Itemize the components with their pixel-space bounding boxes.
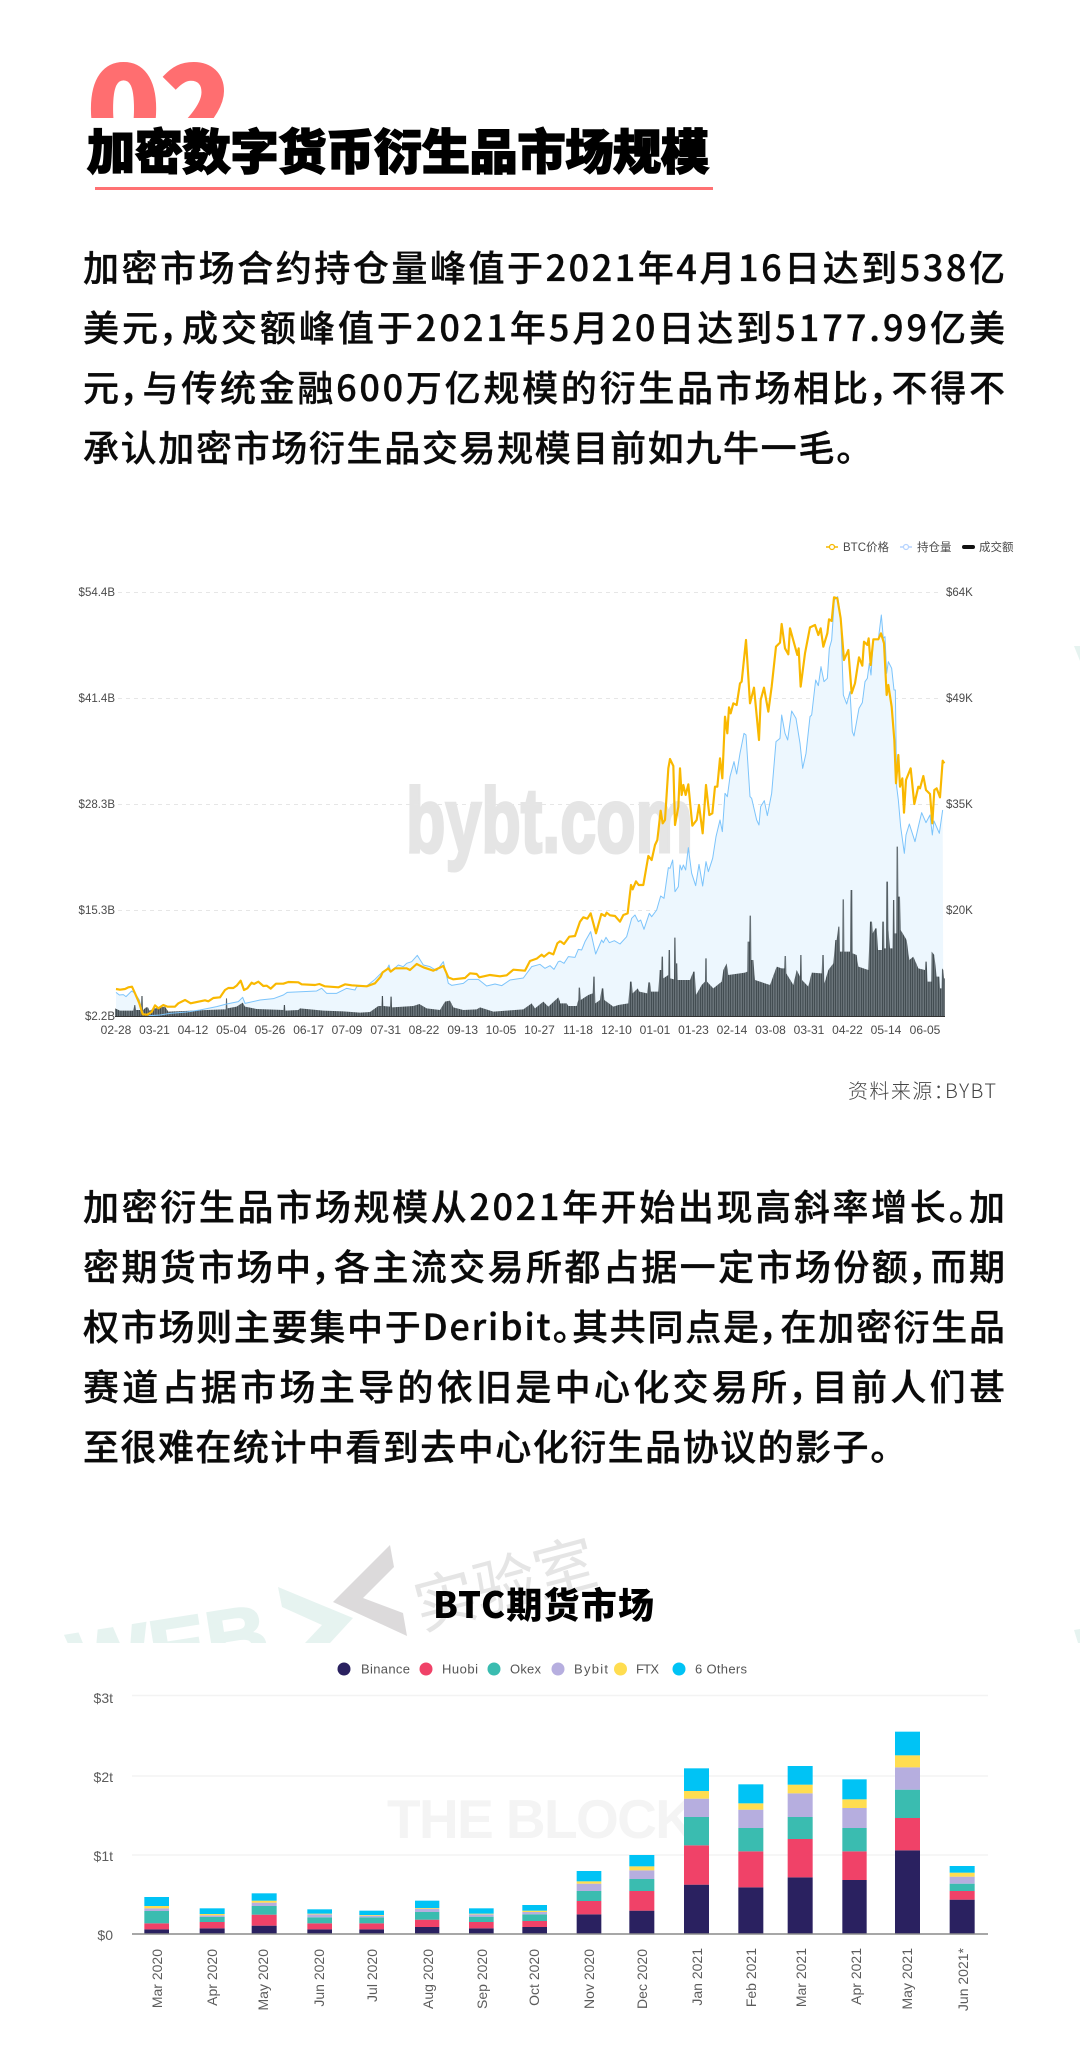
- volume bars: [115, 847, 945, 1017]
- right axis labels: [946, 587, 973, 917]
- x axis labels: 03-08: [755, 1023, 786, 1037]
- source note: 资料来源：BYBT: [848, 1075, 996, 1104]
- month labels: Jan 2021: [689, 1948, 705, 2006]
- bars late 2020 to 2021: [577, 1732, 975, 1934]
- month labels: [149, 1947, 971, 2011]
- text block: paragraph 1: 美元，成交额峰值于2021年5月20日达到5177.99亿美: [83, 300, 1005, 352]
- x axis labels: 07-09: [332, 1023, 363, 1037]
- y axis labels: $1t: [94, 1848, 113, 1864]
- BTC price line: [116, 597, 944, 1015]
- x axis line: [115, 1016, 945, 1018]
- watermark: WEB3 lab logo: [64, 1538, 1080, 1676]
- baseline axis: [132, 1933, 988, 1935]
- section number 02: 02: [87, 15, 233, 189]
- watermark: bybt.com: bybt.com: [406, 770, 693, 872]
- left axis labels: $54.4B: [79, 587, 115, 599]
- x axis labels: 04-12: [178, 1023, 209, 1037]
- month labels: Aug 2020: [420, 1949, 436, 2009]
- bar chart legend: Binance: [361, 1662, 410, 1676]
- month labels: Feb 2021: [743, 1948, 759, 2007]
- y axis labels: $3t: [94, 1690, 113, 1706]
- month labels: Dec 2020: [634, 1949, 650, 2009]
- month labels: Sep 2020: [474, 1949, 490, 2009]
- x axis labels: 08-22: [409, 1023, 440, 1037]
- x axis labels: 10-27: [524, 1023, 555, 1037]
- month labels: Jun 2020: [311, 1949, 327, 2007]
- month labels: Nov 2020: [581, 1949, 597, 2009]
- watermark: WEB3 lab logo: 实验室: [402, 1512, 605, 1647]
- month labels: May 2021: [899, 1948, 915, 2009]
- title: 加密数字货币衍生品市场规模: [87, 113, 709, 183]
- watermark: THE BLOCK: THE BLOCK: [387, 1788, 695, 1850]
- month labels: Apr 2021: [848, 1948, 864, 2005]
- bar chart legend: Huobi: [442, 1662, 478, 1676]
- text block: paragraph 1: [83, 240, 1005, 472]
- x axis labels: 07-31: [370, 1023, 401, 1037]
- month labels: Jun 2021*: [955, 1947, 971, 2011]
- month labels: Jul 2020: [364, 1949, 380, 2002]
- chart heading: BTC期货市场: [433, 1577, 654, 1629]
- title underline: [95, 187, 713, 190]
- month labels: Mar 2020: [149, 1949, 165, 2008]
- text block: paragraph 1: 加密市场合约持仓量峰值于2021年4月16日达到538亿: [83, 240, 1005, 292]
- left axis labels: $15.3B: [79, 905, 115, 917]
- left axis labels: $41.4B: [79, 693, 115, 705]
- right axis labels: $35K: [946, 799, 973, 811]
- x axis labels: 01-23: [678, 1023, 709, 1037]
- text block: paragraph 2: 赛道占据市场主导的依旧是中心化交易所，目前人们甚: [83, 1359, 1005, 1411]
- x axis labels: 05-04: [216, 1023, 247, 1037]
- text block: paragraph 1: 元，与传统金融600万亿规模的衍生品市场相比，不得不: [83, 360, 1005, 412]
- text block: paragraph 2: 权市场则主要集中于Deribit。其共同点是，在加密衍生品: [83, 1299, 1005, 1351]
- left axis labels: [79, 587, 115, 1023]
- x axis labels: 02-14: [717, 1023, 748, 1037]
- bar chart legend: Okex: [510, 1662, 542, 1676]
- y axis labels: [94, 1690, 113, 1943]
- bar chart: BTC futures volume by exchange: [94, 1690, 988, 2011]
- x axis labels: 12-10: [601, 1023, 632, 1037]
- watermark: WEB3 lab logo: WEB: [63, 1588, 274, 1707]
- x axis labels: 06-05: [910, 1023, 941, 1037]
- x axis labels: 09-13: [447, 1023, 478, 1037]
- left axis labels: $2.2B: [85, 1011, 115, 1023]
- edge watermark fragment: [1074, 646, 1080, 661]
- x axis labels: 04-22: [832, 1023, 863, 1037]
- month labels: Oct 2020: [526, 1949, 542, 2006]
- month labels: May 2020: [255, 1949, 271, 2010]
- x axis labels: [101, 1023, 941, 1037]
- right axis labels: $49K: [946, 693, 973, 705]
- month labels: Mar 2021: [793, 1948, 809, 2007]
- text block: paragraph 2: 密期货市场中，各主流交易所都占据一定市场份额，而期: [83, 1239, 1005, 1291]
- text block: paragraph 2: [83, 1179, 1005, 1471]
- bar chart legend: FTX: [636, 1662, 659, 1676]
- bar chart legend: 6 Others: [695, 1662, 748, 1676]
- text block: paragraph 2: 至很难在统计中看到去中心化衍生品协议的影子。: [83, 1419, 888, 1471]
- x axis labels: 06-17: [293, 1023, 324, 1037]
- bar chart legend: [338, 1662, 748, 1676]
- x axis labels: 10-05: [486, 1023, 517, 1037]
- open interest line: [116, 597, 943, 1016]
- chart legend: 持仓量: [917, 540, 952, 554]
- bar chart legend: Bybit: [574, 1662, 608, 1676]
- chart: BTC open interest, volume and price: [79, 540, 1014, 1037]
- y axis labels: $2t: [94, 1769, 113, 1785]
- x axis labels: 02-28: [101, 1023, 132, 1037]
- x axis labels: 11-18: [563, 1023, 593, 1037]
- month labels: Apr 2020: [204, 1949, 220, 2006]
- y axis labels: $0: [97, 1927, 113, 1943]
- text block: paragraph 2: 加密衍生品市场规模从2021年开始出现高斜率增长。加: [83, 1179, 1005, 1231]
- x axis labels: 05-26: [255, 1023, 286, 1037]
- x axis labels: 03-21: [139, 1023, 170, 1037]
- x axis labels: 05-14: [871, 1023, 902, 1037]
- right axis labels: $20K: [946, 905, 973, 917]
- text block: paragraph 1: 承认加密市场衍生品交易规模目前如九牛一毛。: [83, 420, 854, 472]
- chart legend: BTC价格: [843, 540, 889, 554]
- x axis labels: 03-31: [794, 1023, 825, 1037]
- chart legend: [826, 540, 1014, 554]
- x axis labels: 01-01: [640, 1023, 671, 1037]
- chart legend: 成交额: [979, 540, 1014, 554]
- bars 2020: [144, 1893, 547, 1934]
- right axis labels: $64K: [946, 587, 973, 599]
- open interest area: [116, 597, 943, 1017]
- left axis labels: $28.3B: [79, 799, 115, 811]
